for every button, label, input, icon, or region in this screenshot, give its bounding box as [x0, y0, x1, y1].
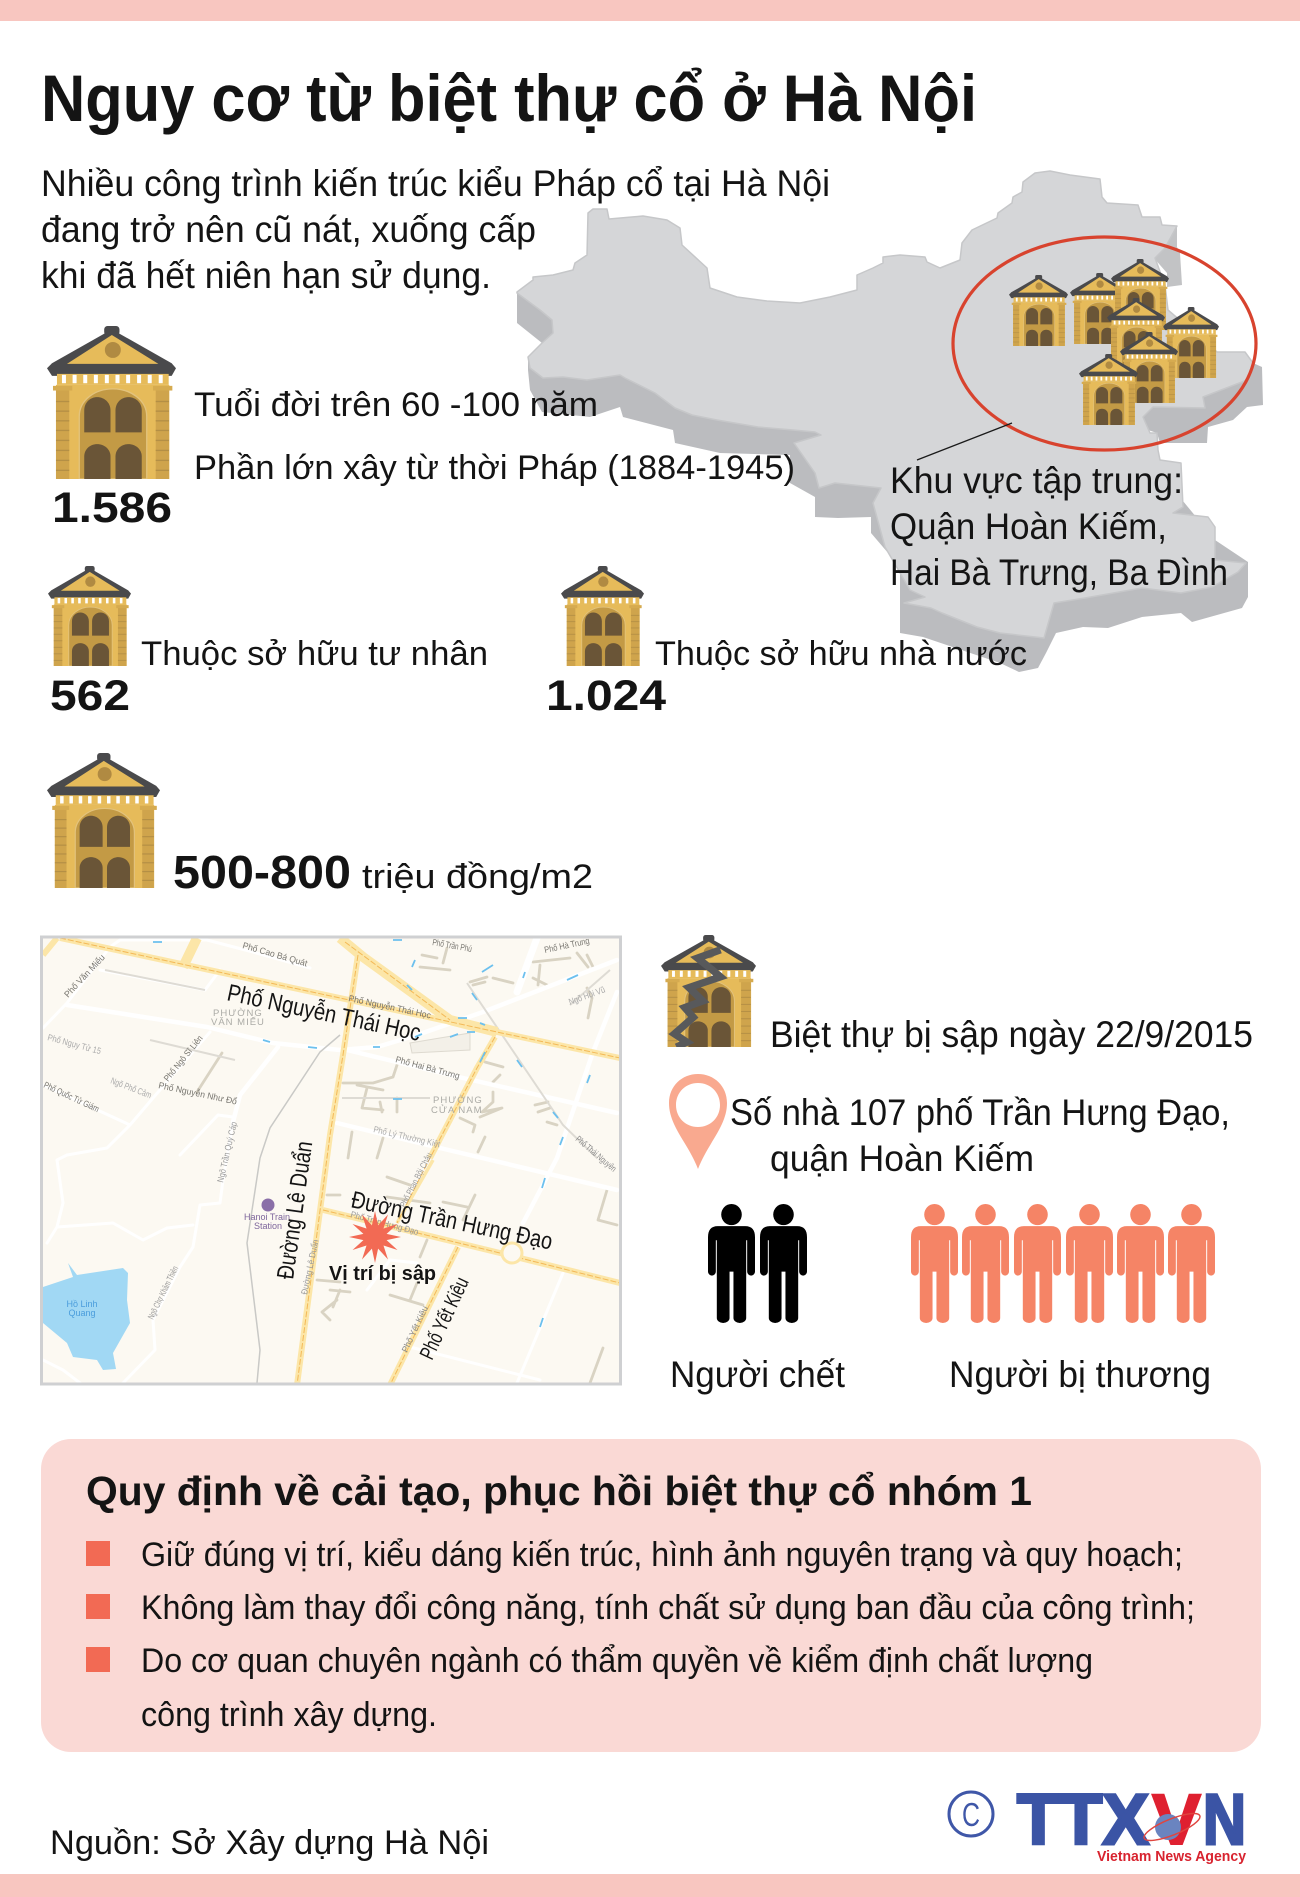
street map panel: CỬA NAM — [431, 1104, 483, 1116]
date text: Biệt thự bị sập ngày 22/9/2015 — [770, 1014, 1253, 1055]
period text: Phần lớn xây từ thời Pháp (1884-1945) — [194, 449, 795, 487]
logo: TTXVN: C — [962, 1796, 980, 1833]
logo: TTXVN: V — [1152, 1781, 1201, 1860]
casualties: injured — [911, 1204, 1215, 1395]
street map panel: Hồ Linh — [66, 1299, 98, 1309]
logo: TTXVN — [949, 1781, 1247, 1865]
area label: Quận Hoàn Kiếm, — [890, 506, 1167, 547]
intro text — [41, 163, 830, 296]
title: Nguy cơ từ biệt thự cổ ở Hà Nội — [41, 61, 977, 135]
label: Thuộc sở hữu tư nhân — [141, 635, 488, 673]
street map panel: Hanoi Train — [244, 1212, 290, 1222]
area label — [890, 460, 1228, 593]
street map panel: PHƯỜNG — [213, 1008, 263, 1019]
address: quận Hoàn Kiếm — [770, 1138, 1034, 1179]
bullet list: Không làm thay đổi công năng, tính chất sử dụng ban đầu của công trình; — [141, 1589, 1195, 1627]
icon: cracked villa — [661, 935, 756, 1047]
street labels: Vị trí bị sập — [329, 1263, 436, 1285]
icon: villa — [561, 566, 644, 666]
number 1.586: 1.586 — [52, 484, 172, 532]
icon: villa — [47, 753, 160, 888]
street map panel: Phố Ngụy Tử 15 — [46, 1032, 102, 1056]
street map panel: Phố Văn Miếu — [62, 952, 107, 999]
star marker: collapse location — [349, 1211, 401, 1263]
street map panel: VĂN MIẾU — [211, 1017, 265, 1028]
map: Hanoi silhouette — [517, 171, 1263, 672]
street map panel — [42, 936, 620, 1385]
address — [669, 1074, 1230, 1179]
intro text: Nhiều công trình kiến trúc kiểu Pháp cổ tại Hà Nội — [41, 163, 830, 204]
label: Thuộc sở hữu nhà nước — [655, 635, 1027, 673]
label: Người chết — [670, 1354, 846, 1395]
icon: villa — [47, 326, 176, 479]
leader line — [917, 423, 1012, 460]
street map panel: Phố Lý Thường Kiệt — [373, 1124, 441, 1149]
stat: total villas — [47, 326, 795, 532]
area label: Hai Bà Trưng, Ba Đình — [890, 552, 1228, 593]
street map panel: Station — [254, 1221, 282, 1231]
icon: location pin — [669, 1074, 727, 1169]
street map panel: Ngõ Trần Quý Cáp — [215, 1121, 239, 1183]
label: Người bị thương — [949, 1354, 1211, 1395]
street labels: Đường Trần Hưng Đạo — [349, 1186, 555, 1255]
street map panel: Phố Quốc Tử Giám — [42, 1080, 101, 1114]
casualties: dead — [670, 1204, 846, 1395]
red circle highlighting area — [953, 237, 1256, 450]
panel: renovation rules — [41, 1439, 1261, 1752]
area label: Khu vực tập trung: — [890, 460, 1183, 501]
stat: state ownership — [546, 566, 1027, 720]
street map panel: Phố Trần Hưng Đạo — [349, 1209, 420, 1237]
street map panel: Phố Phan Bội Châu — [398, 1151, 434, 1209]
stat: private ownership — [48, 566, 488, 720]
price unit: triệu đồng/m2 — [362, 858, 593, 896]
bullet list: Do cơ quan chuyên ngành có thẩm quyền về kiểm định chất lượng — [141, 1642, 1093, 1680]
intro text: khi đã hết niên hạn sử dụng. — [41, 255, 491, 296]
logo: TTXVN: TTX — [1017, 1781, 1149, 1860]
collapse event — [661, 935, 1253, 1055]
street labels — [225, 979, 555, 1363]
logo: TTXVN: N — [1203, 1781, 1246, 1860]
street labels: Phố Yết Kiêu — [416, 1274, 474, 1363]
street map panel: Phố Nguyễn Như Đổ — [158, 1080, 238, 1107]
bullet list: Giữ đúng vị trí, kiểu dáng kiến trúc, hình ảnh nguyên trạng và quy hoạch; — [141, 1536, 1183, 1574]
icon: villa — [48, 566, 131, 666]
bullet list: công trình xây dựng. — [141, 1696, 437, 1734]
street map panel: Ngõ Phố Cảm — [109, 1076, 153, 1100]
street map panel: Đường Lê Duẩn — [299, 1239, 321, 1295]
street map panel: Ngõ Hội Vũ — [567, 984, 606, 1007]
street map panel: PHƯỜNG — [433, 1095, 483, 1106]
street labels: Phố Nguyễn Thái Học — [225, 979, 423, 1047]
street labels: Đường Lê Duẩn — [272, 1139, 318, 1281]
age text: Tuổi đời trên 60 -100 năm — [194, 386, 598, 424]
icon: orange people — [911, 1204, 1215, 1323]
intro text: đang trở nên cũ nát, xuống cấp — [41, 209, 536, 250]
price range: 500-800 — [173, 846, 351, 898]
logo: TTXVN: Vietnam News Agency — [1097, 1848, 1247, 1865]
street map panel: Phố Yết Kiêu — [400, 1304, 430, 1354]
street map panel: Quang — [68, 1308, 96, 1318]
address text: Số nhà 107 phố Trần Hưng Đạo, — [730, 1092, 1230, 1133]
bullet list — [86, 1536, 1195, 1734]
street map panel: Phố Cao Bá Quát — [241, 940, 309, 969]
street map panel: Phố Hai Bà Trưng — [394, 1054, 461, 1081]
icon: cluster of villas — [1009, 259, 1219, 425]
street map panel: Phố Hà Trung — [543, 936, 590, 955]
province map with buildings — [517, 171, 1263, 672]
source: Nguồn: Sở Xây dựng Hà Nội — [50, 1824, 489, 1862]
top band — [0, 0, 1300, 21]
street map panel: Ngõ Chợ Khâm Thiên — [146, 1264, 180, 1321]
bottom band — [0, 1874, 1300, 1897]
stat: price — [47, 753, 593, 898]
number 562: 562 — [50, 672, 130, 720]
street map panel: Phố Nguyễn Thái Học — [348, 993, 432, 1021]
street map panel: Phố Trần Phú — [432, 937, 473, 954]
number 1.024: 1.024 — [546, 672, 666, 720]
street map panel: Phố Thái Nguyên — [574, 1134, 618, 1174]
panel heading: Quy định về cải tạo, phục hồi biệt thự cổ nhóm 1 — [86, 1468, 1032, 1514]
icon: black people — [708, 1204, 807, 1323]
street map panel: Phố Ngô Sĩ Liên — [162, 1033, 205, 1083]
